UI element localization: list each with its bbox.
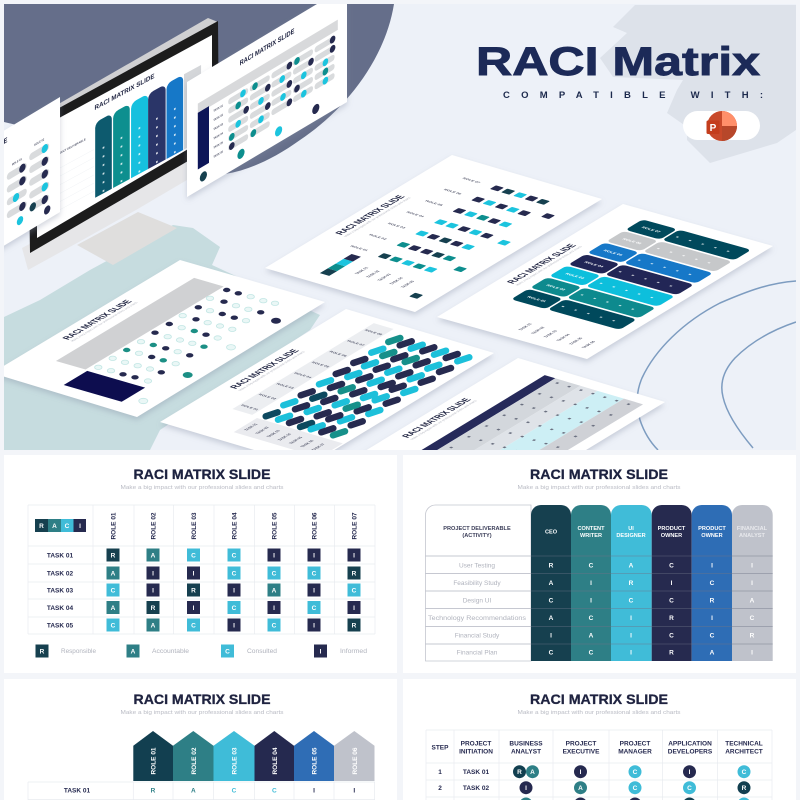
standing slide legend dots	[200, 102, 319, 183]
panel 2 column headers: DESIGNER	[616, 533, 646, 539]
panel 2 column headers	[545, 526, 768, 539]
panel 1 title: RACI MATRIX SLIDE	[134, 466, 270, 482]
pills slide task labels: TASK 07	[311, 443, 326, 451]
panel 1 task labels	[47, 552, 74, 630]
panel 3 task row: C	[232, 788, 237, 794]
slide: left cropped pills	[4, 97, 62, 251]
left slide role labels: ROLE 01	[12, 156, 22, 167]
panel 4 row 2	[438, 781, 750, 794]
pills slide task labels: TASK 02	[255, 426, 270, 435]
panel 3 role labels: ROLE 04	[272, 747, 279, 775]
dots slide navy task block	[64, 371, 145, 402]
chips slide role labels: ROLE 02	[368, 234, 387, 240]
rows slide header labels: ROLE 01	[526, 295, 548, 303]
rows slide task labels: TASK 05	[568, 337, 584, 345]
panel 3 role labels: ROLE 06	[352, 747, 359, 775]
panel 1 legend: Consulted	[247, 648, 277, 655]
left slide pills	[6, 144, 50, 226]
pills slide role labels	[240, 329, 384, 411]
panel 4 column headers: INITIATION	[459, 748, 493, 756]
panel 4 column headers: PROJECT	[566, 740, 596, 748]
panel 2 activity column: Technology Recommendations	[428, 615, 527, 622]
pills slide role labels: ROLE 02	[258, 393, 277, 400]
panel 3 role labels: ROLE 02	[191, 747, 198, 775]
panel 4 column headers: ARCHITECT	[725, 748, 763, 756]
rows slide header labels: ROLE 02	[545, 284, 568, 291]
panel 2 column headers: PRODUCT	[698, 526, 726, 532]
chips slide grid of chips	[378, 185, 550, 273]
panel 4 column headers: EXECUTIVE	[563, 748, 600, 756]
rows slide task labels: TASK 02	[530, 326, 546, 334]
panel 3 task row: R	[151, 788, 156, 794]
banded slide colour bands	[421, 378, 643, 486]
panel 3 role labels: ROLE 03	[232, 747, 238, 775]
rows slide header labels	[526, 226, 663, 303]
left slide role labels: ROLE 02	[34, 137, 44, 147]
monitor chin	[22, 160, 187, 270]
panel 4 column headers: DEVELOPERS	[668, 748, 713, 756]
dark semicircle backdrop	[4, 4, 394, 174]
standing slide task labels: TASK 04	[213, 131, 223, 141]
rows slide header labels: ROLE 05	[602, 249, 625, 257]
slide: banded table	[332, 358, 665, 515]
panel 4 row 1: 1	[438, 769, 442, 776]
rows slide title: RACI MATRIX SLIDE	[504, 243, 579, 285]
panel 1 squares: AIICCCR	[111, 570, 357, 578]
pills slide role cells	[232, 323, 394, 415]
slide: coloured role rows	[437, 204, 773, 359]
pills slide task labels	[243, 423, 327, 451]
panel 3 role labels	[150, 747, 359, 775]
panel 4 column headers: MANAGER	[618, 748, 652, 756]
panel 1 grid lines	[28, 505, 375, 634]
panel: raci grid with squares	[4, 455, 397, 673]
rows slide header labels: ROLE 04	[583, 261, 606, 268]
panel 2 values: CCIRAI	[549, 650, 753, 656]
screen slide title: RACI MATRIX SLIDE	[95, 73, 155, 112]
panel 2 values: RCACII	[549, 562, 753, 570]
powerpoint pill	[683, 111, 760, 141]
screen slide header label: PROJECT DELIVERABLE	[54, 137, 86, 158]
standing slide task labels: TASK 01	[213, 103, 223, 113]
rows slide header labels: ROLE 03	[564, 272, 587, 280]
rows slide task labels: TASK 06	[581, 341, 596, 349]
panel 1 legend	[36, 644, 367, 658]
panel 1 role headers: ROLE 06	[312, 512, 318, 540]
panel 4 column headers: PROJECT	[620, 740, 650, 748]
panel 3 house headers	[133, 731, 374, 781]
panel 2 coloured columns	[531, 505, 773, 661]
panel 2 values	[549, 562, 755, 656]
panel 3 task row: C	[272, 788, 277, 794]
pills slide task labels: TASK 06	[299, 440, 315, 448]
monitor screen slide	[37, 35, 212, 238]
chips slide task labels: TASK 03	[377, 273, 392, 281]
panel 1 role headers: ROLE 01	[110, 512, 118, 540]
rows slide task labels	[518, 322, 597, 349]
panel 2 subtitle: Make a big impact with our professional slides and charts	[518, 485, 681, 491]
panel 4 subtitle: Make a big impact with our professional slides and charts	[518, 710, 681, 716]
panel 2 values: AIRICI	[549, 580, 753, 587]
chips slide raci key	[320, 254, 361, 276]
panel 2 title: RACI MATRIX SLIDE	[530, 466, 668, 482]
panel 1 task labels: TASK 01	[47, 552, 74, 560]
panel: circles table	[403, 679, 796, 800]
left slide role labels	[12, 137, 44, 167]
rows slide task labels: TASK 01	[518, 323, 533, 331]
panel 3 subtitle: Make a big impact with our professional slides and charts	[120, 710, 284, 716]
panel 4 column headers: APPLICATION	[668, 740, 712, 748]
panel 4 row 1: TASK 01	[463, 769, 490, 776]
chips slide task labels: TASK 04	[389, 277, 405, 285]
dots slide subtitle: Make a big impact with our professional slides and charts	[69, 301, 139, 342]
panel 1 task labels: TASK 03	[47, 588, 74, 594]
panel 2 column headers: OWNER	[701, 533, 723, 539]
panel 2 activity column: Financial Plan	[457, 650, 498, 656]
chips slide role labels: ROLE 01	[349, 245, 369, 252]
chips slide role labels: ROLE 03	[387, 222, 406, 229]
monitor stand	[77, 212, 177, 265]
panel 2 activity column: User Testing	[459, 562, 495, 570]
dots slide title: RACI MATRIX SLIDE	[60, 299, 135, 341]
panel 1 squares: RACCIII	[111, 552, 355, 560]
dots slide teal dots	[123, 329, 208, 378]
rows slide subtitle: Make a big impact with our professional slides and charts	[515, 245, 584, 286]
chips slide task labels	[354, 266, 416, 288]
panel 2 column headers: UI	[628, 526, 634, 532]
panel 2 column headers: FINANCIAL	[737, 526, 768, 532]
chips slide subtitle: Make a big impact with our professional slides and charts	[343, 197, 412, 237]
dots slide grey header band	[56, 278, 224, 370]
panel 2 activity column	[426, 505, 531, 661]
monitor top edge	[55, 18, 218, 112]
panel 1 task labels: TASK 05	[47, 622, 74, 630]
grey brush stroke	[600, 5, 796, 163]
panel 1 squares: CIRIAIC	[111, 588, 357, 594]
pills slide role labels: ROLE 04	[293, 372, 313, 379]
panel 4 grid lines	[426, 730, 772, 800]
slide: dots matrix	[0, 260, 325, 417]
chips slide role labels: ROLE 07	[461, 177, 481, 184]
standing slide task labels: TASK 02	[213, 112, 223, 122]
standing slide header band	[198, 20, 338, 114]
slide: chips table	[265, 155, 602, 312]
pills slide role labels: ROLE 01	[240, 404, 259, 411]
panel 1 squares: ARICICI	[111, 605, 355, 612]
panel 1 role headers: ROLE 07	[352, 512, 358, 540]
dots slide open dots	[95, 294, 279, 404]
panel 1 role headers	[110, 512, 358, 540]
chips slide role labels: ROLE 05	[424, 200, 444, 206]
panel 1 subtitle: Make a big impact with our professional slides and charts	[120, 485, 284, 491]
panel 3 task row	[64, 788, 355, 794]
pills slide role labels: ROLE 07	[346, 340, 365, 346]
panel 2 activity column: (ACTIVITY)	[462, 533, 492, 539]
panel 1 squares	[106, 548, 360, 632]
pills slide task column	[234, 418, 343, 458]
panel 1 legend: RACI	[40, 648, 322, 656]
pills slide task labels: TASK 03	[266, 430, 281, 438]
rows slide header labels: ROLE 06	[621, 237, 644, 245]
chips slide role labels: ROLE 06	[443, 188, 462, 195]
panel 1 role headers: ROLE 04	[232, 512, 238, 540]
teal brush stroke	[4, 225, 320, 450]
panel 4 column headers: PROJECT	[461, 740, 491, 748]
panel 1 raci key: RACI	[39, 523, 81, 530]
panel 1 squares: CACICIR	[111, 622, 357, 630]
panel 4 row 2: 2	[438, 785, 442, 792]
pills slide task labels: TASK 04	[277, 433, 293, 441]
panel 2 values: CICCRA	[549, 598, 755, 604]
chips slide task labels: TASK 02	[365, 270, 381, 278]
main title: RACI Matrix	[476, 40, 760, 84]
panel 3 task row: I	[353, 788, 355, 794]
panel 2 values: ACIRIC	[549, 615, 755, 622]
rows slide header cells	[511, 219, 677, 309]
panel 4 row 3 circles	[520, 798, 750, 800]
chips slide role labels	[349, 177, 482, 252]
panel 2 activity column: PROJECT DELIVERABLE	[443, 526, 511, 532]
panel 2 column headers: PRODUCT	[658, 526, 686, 532]
panel 3 role labels: ROLE 05	[312, 747, 318, 775]
chips slide task labels: TASK 05	[400, 280, 416, 288]
panel 4 column headers: ANALYST	[511, 748, 541, 756]
standing slide task labels: TASK 06	[213, 149, 223, 159]
standing slide step column	[198, 106, 209, 170]
panel 4 row 1	[438, 765, 750, 778]
pills slide role labels: ROLE 03	[275, 383, 295, 389]
chips slide legend	[409, 213, 555, 299]
panel: house header table	[4, 679, 397, 800]
panel 4 column headers: TECHNICAL	[725, 740, 763, 748]
rows slide value bars	[548, 230, 751, 330]
banded slide title: RACI MATRIX SLIDE	[399, 397, 474, 439]
chips slide role labels: ROLE 04	[405, 211, 426, 218]
panel 1 task labels: TASK 02	[47, 570, 74, 578]
panel 1 legend: Accountable	[152, 648, 189, 655]
standing slide task labels: TASK 03	[213, 121, 223, 132]
monitor	[22, 18, 219, 270]
panel 3 grid lines	[28, 782, 375, 800]
panel 1 role headers: ROLE 05	[272, 512, 278, 540]
compatible with subtitle: COMPATIBLE WITH:	[503, 90, 763, 101]
panel 4 column headers: BUSINESS	[509, 740, 543, 748]
panel 4 title: RACI MATRIX SLIDE	[530, 691, 668, 707]
blue curve inner	[722, 322, 796, 448]
rows slide header labels: ROLE 07	[640, 226, 663, 233]
standing slide task labels: TASK 05	[213, 140, 223, 150]
icon: powerpoint: P	[710, 123, 717, 134]
panel 4 column headers	[432, 740, 763, 756]
panel 3 task row: A	[191, 788, 196, 794]
panel 1 legend: Responsible	[61, 648, 96, 655]
banded slide navy header	[406, 375, 555, 462]
panel 2 values: IAICCR	[550, 632, 755, 640]
blue curve outer	[637, 281, 796, 450]
panel 1 raci key	[35, 519, 86, 532]
panel 3 role labels: ROLE 01	[150, 747, 158, 775]
panel 2 column headers: OWNER	[661, 533, 682, 539]
panel 1 legend: Informed	[340, 648, 367, 655]
hero section	[4, 4, 796, 450]
panel 4 column headers: STEP	[432, 744, 449, 752]
pills slide role labels: ROLE 08	[364, 329, 383, 336]
panel 2 column headers: WRITER	[580, 533, 602, 539]
pills slide title: RACI MATRIX SLIDE	[227, 348, 302, 390]
panel: column table	[403, 455, 796, 673]
standing slide pills	[228, 34, 335, 152]
panel 4 row 1: RAICIC	[517, 769, 747, 776]
pills slide role labels: ROLE 05	[311, 361, 330, 368]
panel 3 task row: I	[313, 788, 315, 794]
panel 1 role headers: ROLE 02	[150, 512, 158, 540]
chips slide task labels: TASK 01	[354, 267, 370, 275]
panel 2 activity column: Design UI	[463, 598, 491, 604]
slide: pills matrix	[160, 309, 494, 466]
pills slide grid	[266, 338, 469, 435]
chips slide title: RACI MATRIX SLIDE	[333, 194, 407, 236]
screen slide columns	[95, 65, 201, 198]
dots slide dark dots	[119, 288, 281, 379]
standing slide task labels	[213, 103, 223, 159]
banded slide subtitle: Make a big impact with our professional slides and charts	[409, 400, 478, 440]
panel 2 activity column: Financial Study	[455, 632, 500, 640]
pills slide role labels: ROLE 06	[328, 351, 348, 357]
panel 4 row 2: IACCR	[525, 785, 747, 792]
panel 3 task row: TASK 01	[64, 788, 91, 794]
panel 2 column headers: CEO	[545, 530, 558, 536]
pills slide task labels: TASK 01	[243, 423, 259, 431]
pills slide subtitle: Make a big impact with our professional slides and charts	[237, 351, 306, 391]
monitor bezel	[28, 21, 219, 253]
panel 2 column headers: CONTENT	[577, 526, 605, 532]
panel 1 role headers: ROLE 03	[191, 512, 198, 540]
slide: standing table with pills	[187, 0, 347, 197]
rows slide task labels: TASK 04	[556, 333, 572, 342]
standing slide title: RACI MATRIX SLIDE	[240, 27, 295, 68]
panel 2 column headers: ANALYST	[739, 533, 766, 539]
panel 1 task labels: TASK 04	[47, 605, 74, 612]
rows slide task labels: TASK 03	[543, 330, 558, 338]
panel 3 title: RACI MATRIX SLIDE	[134, 691, 270, 707]
panel 2 activity column: Feasibility Study	[453, 580, 501, 587]
pills slide task labels: TASK 05	[288, 436, 304, 444]
panel 4 row 2: TASK 02	[463, 785, 490, 792]
